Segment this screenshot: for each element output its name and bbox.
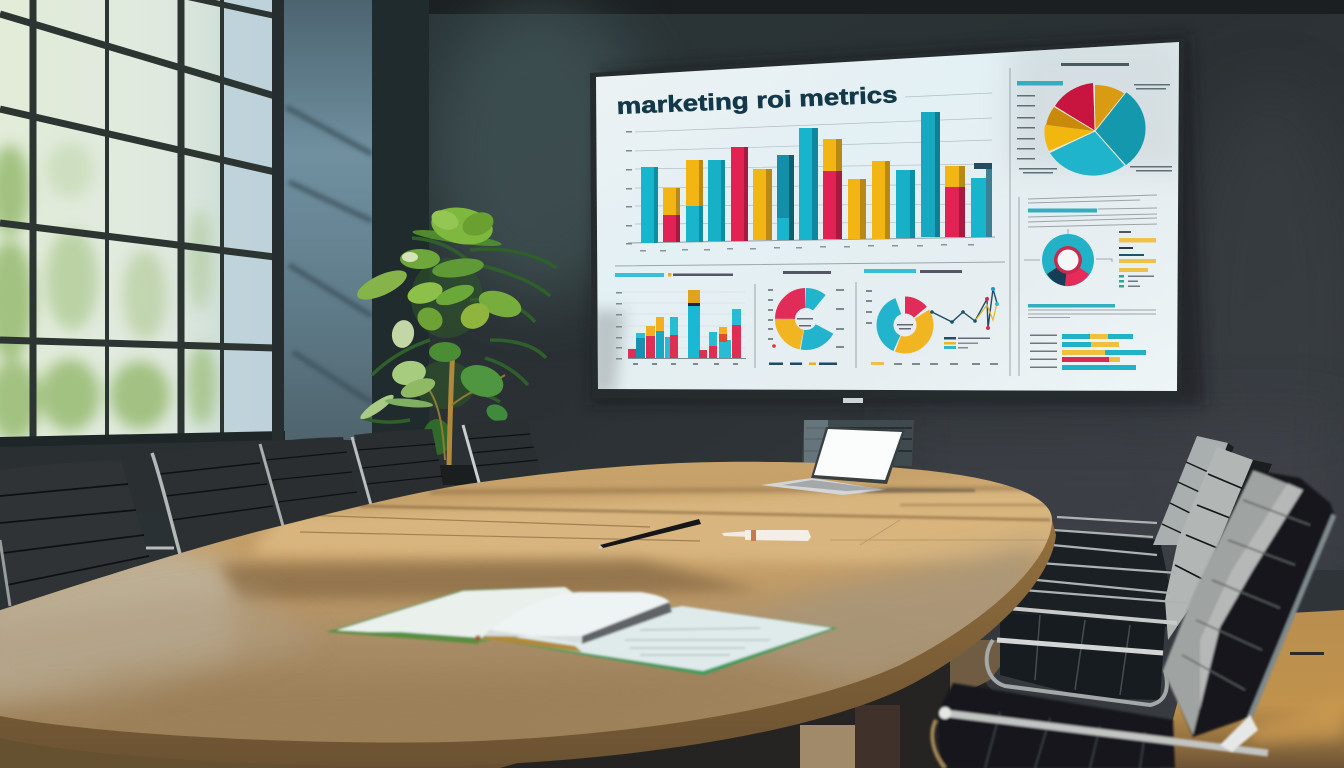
bars (641, 112, 992, 243)
mini bar chart (615, 273, 746, 365)
table (0, 462, 1060, 766)
chair back far (1153, 436, 1234, 550)
seat front (932, 683, 1268, 768)
marker (722, 530, 811, 541)
window (0, 0, 285, 447)
right chairs (932, 436, 1335, 768)
arm rests far (1023, 517, 1187, 603)
pen (598, 519, 701, 549)
chair 2 (152, 443, 277, 554)
laptop (761, 427, 975, 495)
stacked bars block (1028, 304, 1156, 370)
chair 3 (260, 437, 360, 526)
screen frame (590, 34, 1205, 405)
chair 4 (352, 429, 444, 505)
chair back front (1163, 470, 1335, 752)
open book (327, 587, 837, 675)
text lines block (1028, 195, 1157, 227)
donut chart: centre (768, 271, 844, 365)
table edge (0, 520, 1056, 766)
foliage back (411, 258, 494, 455)
divider lines (615, 68, 1019, 376)
pie chart (1044, 83, 1146, 176)
title: marketing roi metrics (616, 81, 898, 119)
left chairs (0, 420, 541, 606)
chair 1 (0, 460, 174, 606)
chair back middle (1165, 447, 1272, 640)
wall base and floor (1160, 570, 1344, 768)
pie legend (1017, 63, 1172, 174)
pillar wall (282, 0, 429, 440)
ring donut (1024, 229, 1112, 286)
far chair (802, 420, 914, 466)
table surface (0, 462, 1052, 743)
donut legend (1119, 231, 1156, 288)
under table and legs (0, 640, 1020, 768)
line chart (930, 287, 999, 349)
leaves (353, 203, 525, 425)
plant (353, 203, 557, 485)
screen dashboard (590, 35, 1185, 395)
chair 5 (463, 420, 541, 486)
donut chart: right (864, 269, 998, 365)
bar chart: main (626, 93, 995, 252)
seats between arms (1005, 530, 1178, 628)
seat middle (987, 608, 1177, 705)
teal highlight bar (1028, 208, 1097, 212)
pot (440, 465, 478, 485)
